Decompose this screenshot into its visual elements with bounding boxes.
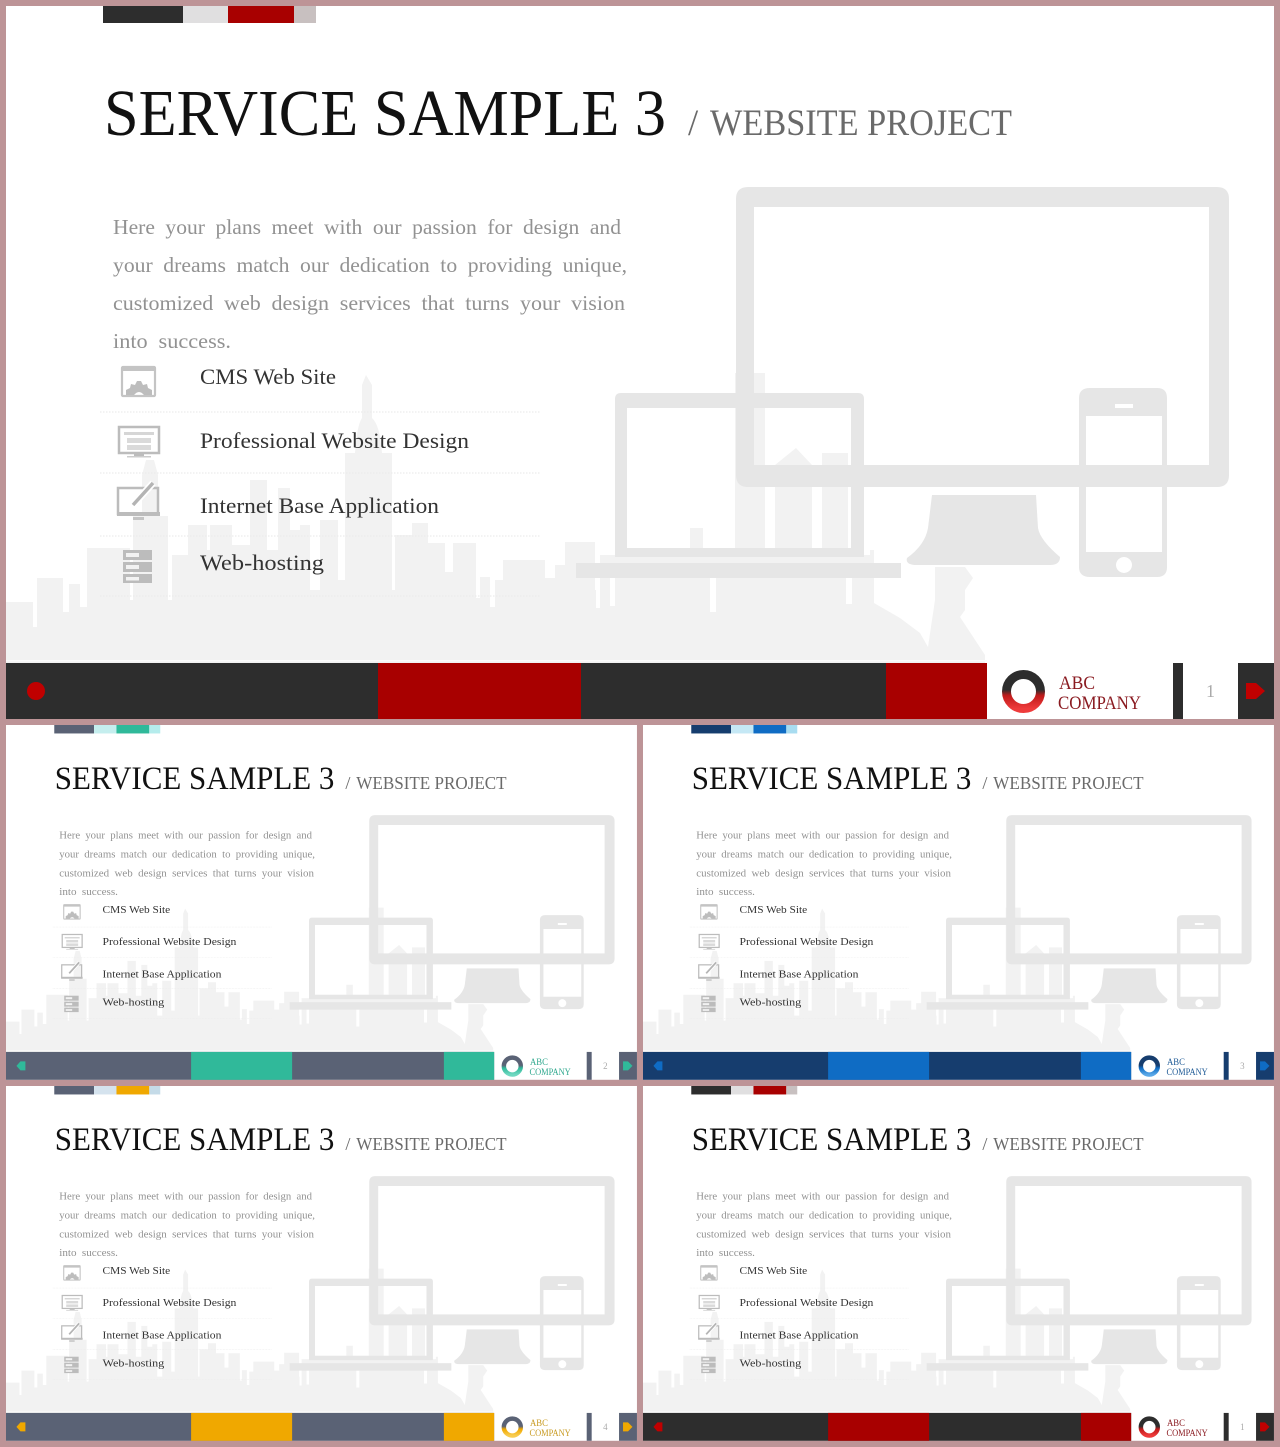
company name xyxy=(1058,673,1141,714)
top colour tab xyxy=(691,725,797,733)
intro paragraph: Here your plans meet with our passion for design and xyxy=(59,1191,313,1202)
intro paragraph: your dreams match our dedication to providing unique, xyxy=(696,1210,952,1221)
item: internet base application: Internet Base Application xyxy=(740,968,859,980)
company name xyxy=(529,1419,571,1439)
intro paragraph xyxy=(696,1191,952,1259)
illustration: skyline and devices xyxy=(643,1176,1252,1413)
top colour tab xyxy=(54,1086,160,1094)
item: professional website design: Professional Website Design xyxy=(200,428,469,453)
item: professional website design: Professional Website Design xyxy=(740,936,874,948)
subtitle: / xyxy=(688,102,699,143)
item: web-hosting: Web-hosting xyxy=(740,997,802,1009)
icon: monitor xyxy=(62,1295,82,1311)
page number: 3 xyxy=(1240,1061,1245,1071)
company name: COMPANY xyxy=(1058,693,1141,714)
item: professional website design: Professional Website Design xyxy=(103,936,237,948)
company name: ABC xyxy=(530,1058,548,1068)
logo ring xyxy=(504,1419,521,1436)
company name: COMPANY xyxy=(529,1429,571,1439)
company name: COMPANY xyxy=(1166,1429,1208,1439)
item: cms web site: CMS Web Site xyxy=(740,904,807,916)
intro paragraph: Here your plans meet with our passion for design and xyxy=(59,830,313,841)
top colour tab xyxy=(691,1086,797,1094)
intro paragraph: customized web design services that turns your vision xyxy=(113,291,626,315)
item: cms web site: CMS Web Site xyxy=(103,1265,170,1277)
icon: server xyxy=(701,1357,716,1373)
item: internet base application: Internet Base Application xyxy=(740,1329,859,1341)
intro paragraph: into success. xyxy=(59,1248,118,1259)
icon: server xyxy=(64,996,79,1012)
intro paragraph: your dreams match our dedication to providing unique, xyxy=(59,1210,315,1221)
service list xyxy=(690,904,909,1019)
footer bar xyxy=(643,1052,1274,1080)
item: cms web site: CMS Web Site xyxy=(103,904,170,916)
footer bar xyxy=(643,1413,1274,1441)
icon: cms xyxy=(701,1266,717,1280)
intro paragraph: Here your plans meet with our passion for design and xyxy=(696,1191,950,1202)
icon: monitor xyxy=(119,427,159,458)
intro paragraph: into success. xyxy=(113,329,231,353)
icon: pen on screen xyxy=(698,1323,720,1342)
intro paragraph: customized web design services that turns your vision xyxy=(696,1229,952,1240)
company name xyxy=(529,1058,571,1078)
item: internet base application: Internet Base Application xyxy=(103,968,222,980)
panel: blue theme slide xyxy=(643,725,1274,1080)
top colour tab xyxy=(103,6,316,23)
subtitle: WEBSITE PROJECT xyxy=(356,773,507,793)
logo ring xyxy=(504,1058,521,1075)
intro paragraph: your dreams match our dedication to providing unique, xyxy=(59,849,315,860)
subtitle: WEBSITE PROJECT xyxy=(993,773,1144,793)
subtitle: WEBSITE PROJECT xyxy=(356,1134,507,1154)
intro paragraph xyxy=(59,1191,315,1259)
icon: monitor xyxy=(699,1295,719,1311)
intro paragraph: customized web design services that turns your vision xyxy=(696,868,952,879)
icon: server xyxy=(64,1357,79,1373)
subtitle: WEBSITE PROJECT xyxy=(710,102,1012,143)
title: SERVICE SAMPLE 3 xyxy=(55,1122,334,1158)
subtitle: / xyxy=(982,773,988,793)
item: cms web site: CMS Web Site xyxy=(200,364,336,389)
illustration: skyline and devices xyxy=(6,1176,615,1413)
company name: ABC xyxy=(1167,1419,1185,1429)
logo ring xyxy=(1141,1058,1158,1075)
title: SERVICE SAMPLE 3 xyxy=(692,1122,971,1158)
panel: yellow theme slide xyxy=(6,1086,637,1441)
service list xyxy=(53,904,272,1019)
icon: pen on screen xyxy=(117,483,160,520)
item: professional website design: Professional Website Design xyxy=(103,1297,237,1309)
logo ring xyxy=(1006,674,1040,708)
page number: 4 xyxy=(603,1422,608,1432)
footer bar xyxy=(6,1052,637,1080)
footer bar xyxy=(6,1413,637,1441)
title: SERVICE SAMPLE 3 xyxy=(692,761,971,797)
intro paragraph xyxy=(113,215,627,353)
page number: 2 xyxy=(603,1061,608,1071)
intro paragraph: into success. xyxy=(696,1248,755,1259)
subtitle: WEBSITE PROJECT xyxy=(993,1134,1144,1154)
intro paragraph: customized web design services that turns your vision xyxy=(59,1229,315,1240)
item: web-hosting: Web-hosting xyxy=(740,1358,802,1370)
illustration: skyline and devices xyxy=(6,187,1229,663)
intro paragraph xyxy=(696,830,952,898)
footer bar xyxy=(6,663,1274,719)
icon: pen on screen xyxy=(698,962,720,981)
intro paragraph: your dreams match our dedication to providing unique, xyxy=(113,253,627,277)
title: SERVICE SAMPLE 3 xyxy=(104,77,666,150)
company name: COMPANY xyxy=(1166,1068,1208,1078)
subtitle: / xyxy=(345,773,351,793)
company name xyxy=(1166,1419,1208,1439)
intro paragraph: your dreams match our dedication to providing unique, xyxy=(696,849,952,860)
illustration: skyline and devices xyxy=(6,815,615,1052)
panel: red theme slide small xyxy=(643,1086,1274,1441)
title: SERVICE SAMPLE 3 xyxy=(55,761,334,797)
page number: 1 xyxy=(1240,1422,1245,1432)
icon: server xyxy=(701,996,716,1012)
top colour tab xyxy=(54,725,160,733)
icon: monitor xyxy=(699,934,719,950)
intro paragraph: Here your plans meet with our passion for design and xyxy=(113,215,622,239)
company name: ABC xyxy=(1167,1058,1185,1068)
company name: ABC xyxy=(530,1419,548,1429)
intro paragraph: customized web design services that turns your vision xyxy=(59,868,315,879)
company name: COMPANY xyxy=(529,1068,571,1078)
icon: server xyxy=(123,550,152,583)
icon: cms xyxy=(122,367,155,396)
icon: pen on screen xyxy=(61,1323,83,1342)
item: professional website design: Professional Website Design xyxy=(740,1297,874,1309)
intro paragraph: into success. xyxy=(696,887,755,898)
company name xyxy=(1166,1058,1208,1078)
service list xyxy=(53,1265,272,1380)
icon: monitor xyxy=(62,934,82,950)
item: web-hosting: Web-hosting xyxy=(103,1358,165,1370)
item: web-hosting: Web-hosting xyxy=(103,997,165,1009)
subtitle: / xyxy=(345,1134,351,1154)
service list xyxy=(690,1265,909,1380)
logo ring xyxy=(1141,1419,1158,1436)
icon: cms xyxy=(701,905,717,919)
icon: cms xyxy=(64,905,80,919)
intro paragraph xyxy=(59,830,315,898)
item: internet base application: Internet Base Application xyxy=(103,1329,222,1341)
subtitle: / xyxy=(982,1134,988,1154)
service list xyxy=(100,364,540,596)
item: internet base application: Internet Base Application xyxy=(200,493,439,518)
item: cms web site: CMS Web Site xyxy=(740,1265,807,1277)
item: web-hosting: Web-hosting xyxy=(200,550,324,575)
intro paragraph: into success. xyxy=(59,887,118,898)
panel: main slide, red theme xyxy=(6,6,1274,719)
page number: 1 xyxy=(1206,681,1215,701)
company name: ABC xyxy=(1059,673,1095,694)
panel: teal theme slide xyxy=(6,725,637,1080)
icon: cms xyxy=(64,1266,80,1280)
intro paragraph: Here your plans meet with our passion for design and xyxy=(696,830,950,841)
illustration: skyline and devices xyxy=(643,815,1252,1052)
icon: pen on screen xyxy=(61,962,83,981)
